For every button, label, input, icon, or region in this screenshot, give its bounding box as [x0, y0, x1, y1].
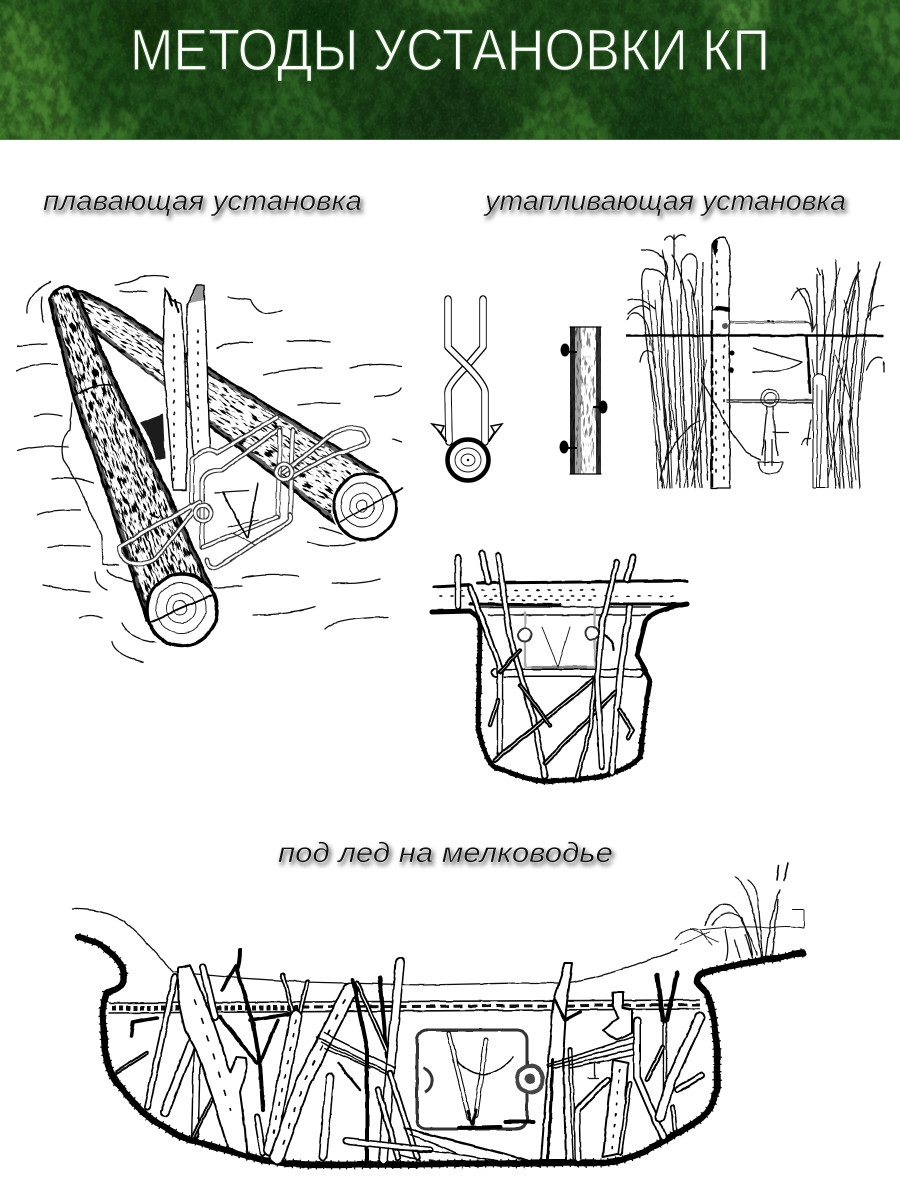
ice band: [109, 1000, 700, 1013]
pit outline: [432, 604, 687, 782]
square trap frame: [417, 1030, 543, 1129]
right reeds: [792, 260, 884, 488]
bottom roots and logs: [346, 1128, 543, 1167]
square trap frame: [518, 608, 598, 667]
heading: under ice in shallow water: под лед на мелководье: [278, 837, 613, 868]
illustration: trap in a stick pen through the ice: [432, 553, 687, 782]
illustration: under-ice set in shallow water: [72, 863, 804, 1167]
dark wedge behind stakes: [140, 414, 165, 460]
illustration: stake with reeds on the water: [626, 235, 884, 488]
back log: [77, 290, 380, 525]
front log: [48, 285, 213, 622]
cross bar: [495, 668, 640, 678]
sticks: [458, 553, 633, 778]
heading: floating installation: плавающая установка: [43, 185, 362, 216]
bank and bottom outline: [78, 937, 803, 1165]
illustration: floating raft of two logs: [16, 274, 404, 664]
header banner: forest photo: [0, 0, 900, 140]
front log end with rings: [146, 574, 218, 646]
ice lines: [480, 607, 650, 615]
left stick pen: [117, 950, 417, 1160]
pair of stakes: [163, 285, 210, 490]
water ripples: [17, 276, 402, 662]
title: МЕТОДЫ УСТАНОВКИ КП: [130, 18, 770, 83]
back log end with rings: [331, 470, 402, 541]
central stake: [711, 237, 734, 488]
right spring and ring: [276, 428, 368, 480]
snow line: [72, 909, 677, 985]
log cross section: [448, 440, 488, 480]
nails: [438, 430, 446, 441]
right stick pen: [541, 963, 702, 1160]
left spring and ring: [120, 502, 211, 563]
trap in the reeds: [703, 321, 816, 474]
trap wire frame: [192, 417, 293, 568]
left reeds: [627, 235, 708, 488]
upper log: [432, 581, 687, 606]
illustration: forked stake and log end: [432, 299, 502, 480]
illustration: vertical stake with nails: [560, 327, 608, 474]
heading: sinking installation: утапливающая установка: [483, 185, 846, 216]
shore reeds: [675, 863, 804, 960]
water line: [626, 334, 883, 337]
